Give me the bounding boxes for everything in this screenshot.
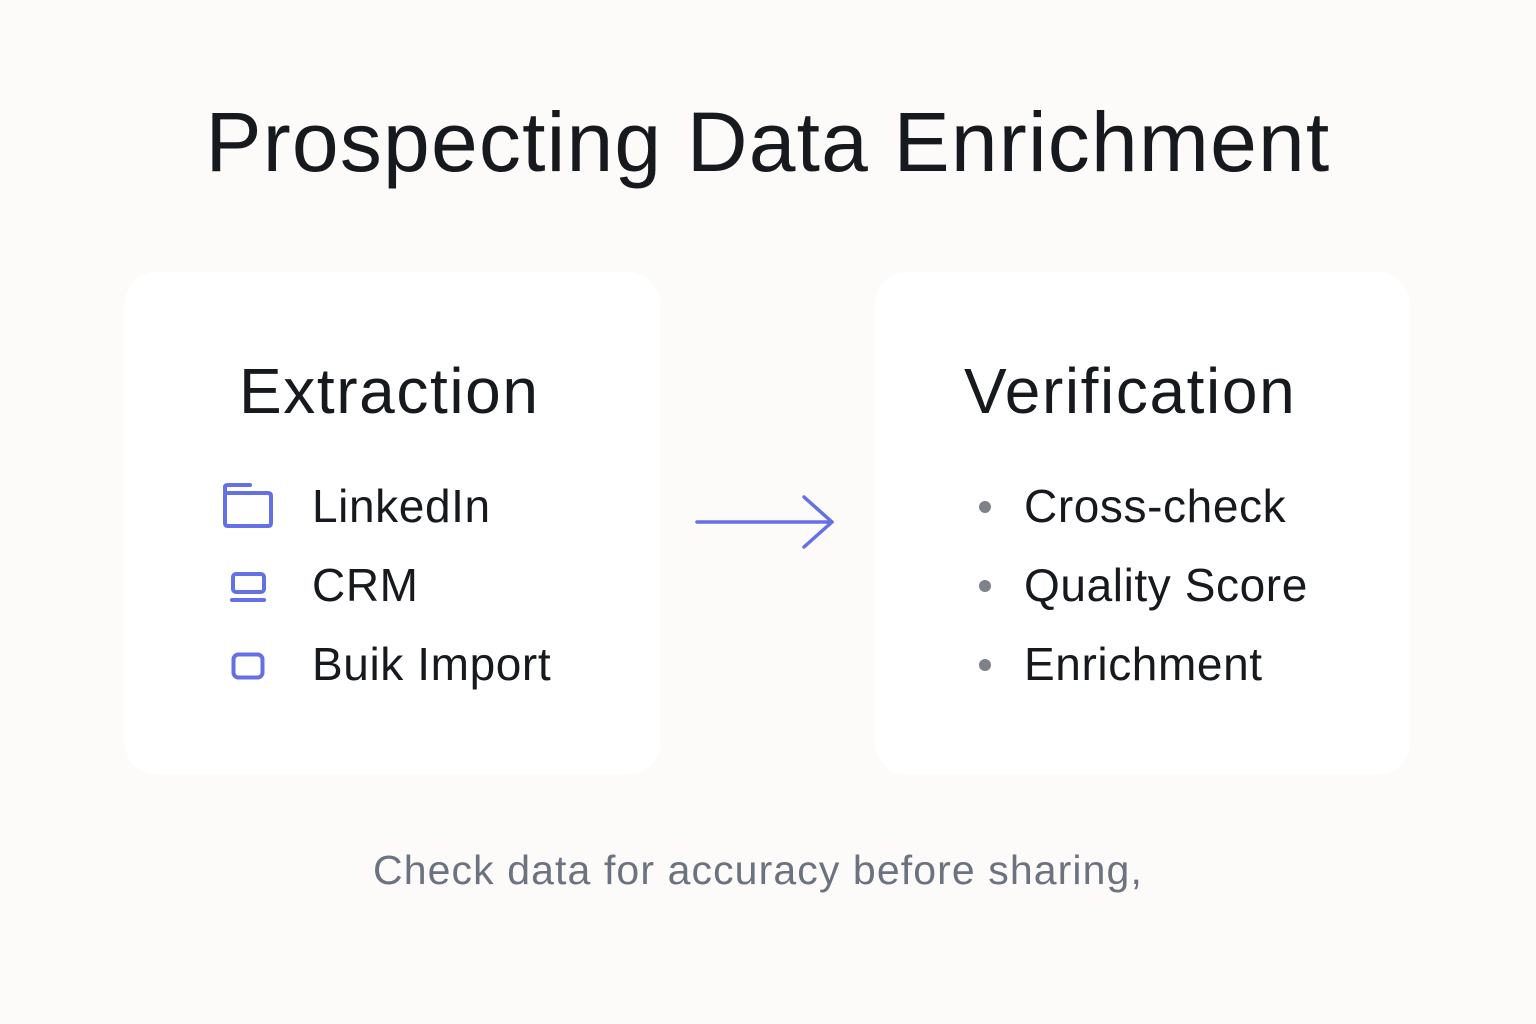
list: verification steps: Enrichment [1024,638,1263,690]
heading: verification: Verification [964,355,1296,427]
panel: verification [875,272,1410,775]
item: Bulk Import: Buik Import [312,638,551,690]
panel: extraction [125,272,660,775]
arrow [695,495,834,549]
title: Prospecting Data Enrichment [206,95,1330,189]
item: LinkedIn: LinkedIn [312,480,491,532]
item: CRM: CRM [312,559,419,611]
footer note: Check data for accuracy before sharing, [373,847,1143,893]
icon: folder [223,483,273,528]
list: verification steps [979,480,1308,690]
list: verification steps: Quality Score [1024,559,1308,611]
item: CRM [230,559,419,611]
item: LinkedIn [223,480,491,532]
list: verification steps: Cross-check [1024,480,1286,532]
icon: box [232,652,264,680]
heading: extraction: Extraction [239,355,540,427]
icon: laptop [230,572,266,602]
